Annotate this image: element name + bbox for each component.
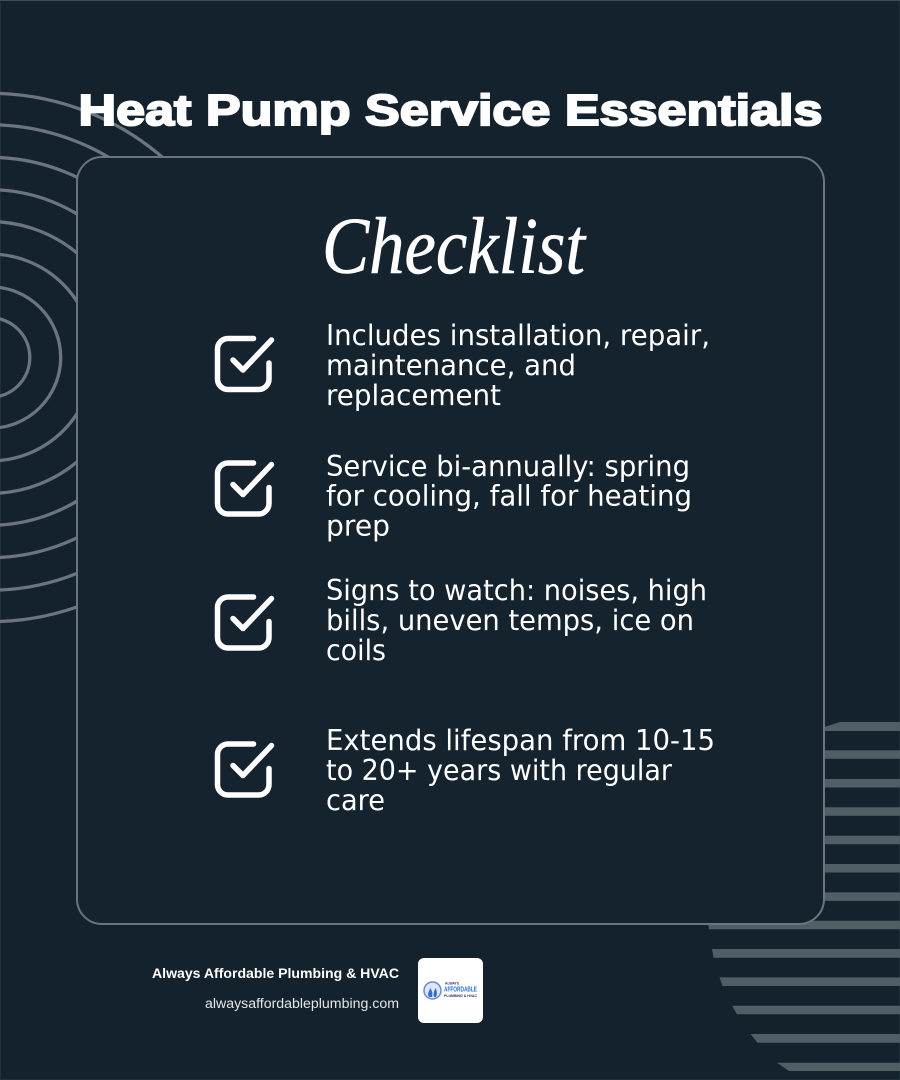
panel: checklist bbox=[77, 157, 824, 924]
footer company name: Always Affordable Plumbing & HVAC bbox=[152, 966, 399, 981]
text: item 1: Includes installation, repair, bbox=[326, 319, 710, 352]
text: item 2: for cooling, fall for heating bbox=[326, 480, 692, 512]
icon: checkbox 2 bbox=[218, 463, 272, 514]
checklist heading: Checklist bbox=[322, 203, 587, 291]
logo: ALWAYS bbox=[445, 980, 459, 986]
text: item 4: care bbox=[326, 784, 385, 817]
logo: PLUMBING & HVAC bbox=[444, 993, 477, 998]
icon: checkbox 4 bbox=[218, 744, 272, 795]
text: item 2: Service bi-annually: spring bbox=[326, 450, 690, 483]
logo: AFFORDABLE bbox=[444, 986, 477, 994]
text: item 1: replacement bbox=[326, 379, 501, 412]
text: item 2: prep bbox=[326, 510, 390, 542]
decorative stripes bbox=[708, 722, 900, 1071]
logo bbox=[418, 958, 483, 1023]
text: item 3: bills, uneven temps, ice on bbox=[326, 604, 694, 637]
icon: checkbox 1 bbox=[218, 338, 272, 390]
text: item 3 bbox=[326, 574, 707, 667]
text: item 1: maintenance, and bbox=[326, 349, 576, 382]
text: item 2 bbox=[326, 450, 692, 542]
icon: checkbox 3 bbox=[218, 597, 272, 648]
decorative concentric rings bbox=[0, 93, 254, 622]
text: item 4: to 20+ years with regular bbox=[326, 754, 672, 787]
text: item 4: Extends lifespan from 10-15 bbox=[326, 724, 715, 757]
text: item 1 bbox=[326, 319, 710, 412]
text: item 4 bbox=[326, 724, 715, 817]
title: Heat Pump Service Essentials bbox=[78, 86, 822, 135]
text: item 3: coils bbox=[326, 634, 386, 667]
footer website: alwaysaffordableplumbing.com bbox=[205, 996, 399, 1011]
text: item 3: Signs to watch: noises, high bbox=[326, 574, 707, 607]
